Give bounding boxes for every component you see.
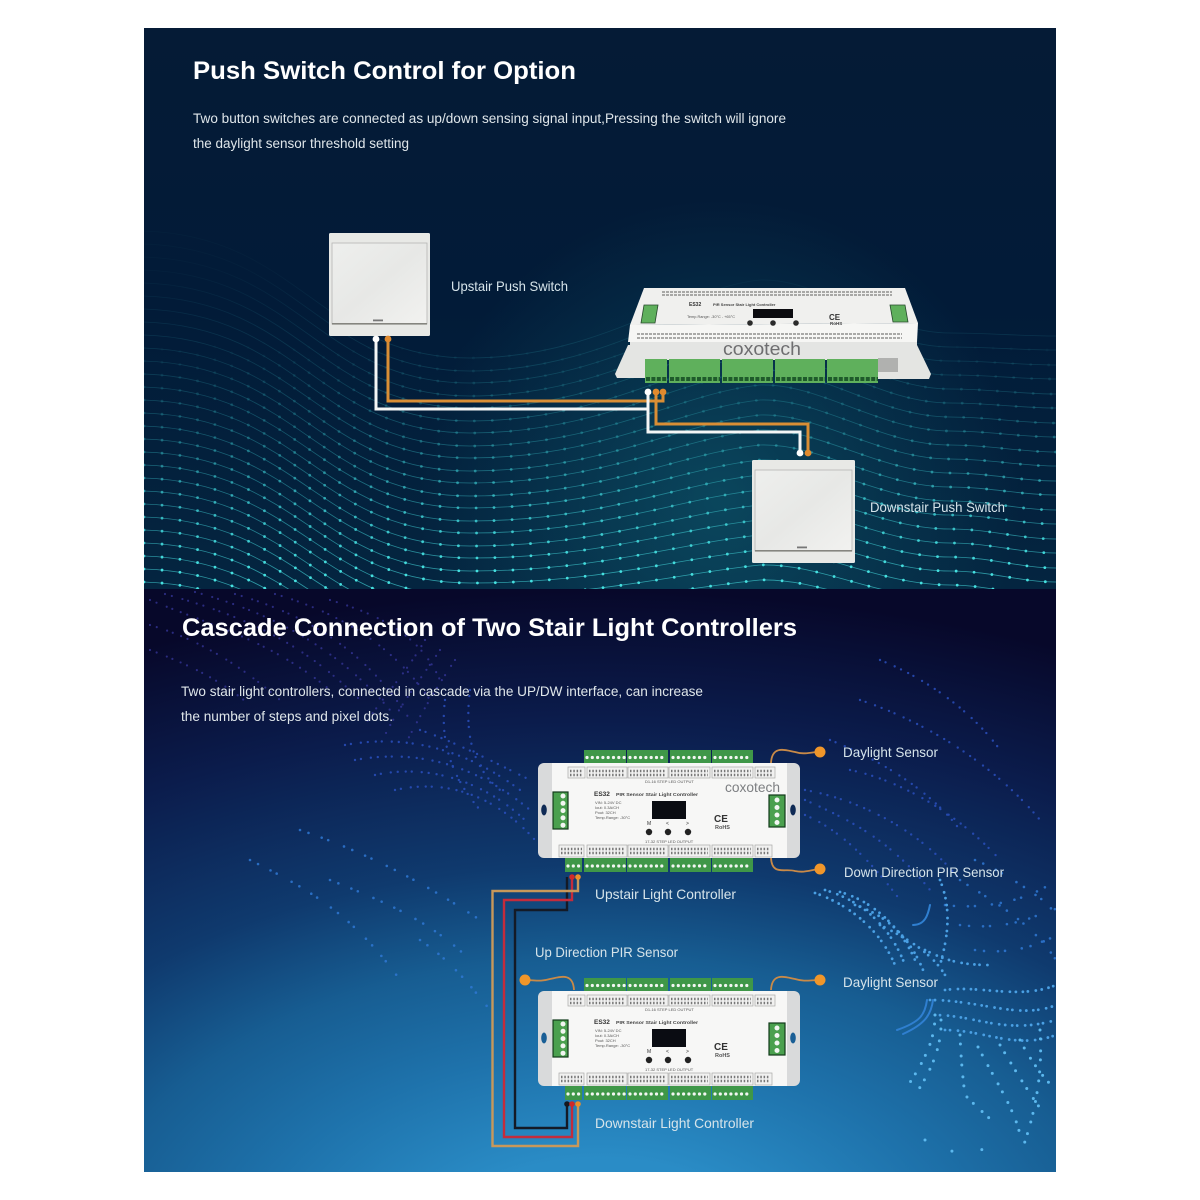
text block: push switch description: the daylight sensor threshold setting — [193, 136, 409, 151]
label: upstair light controller: Upstair Light Controller — [595, 886, 736, 902]
controller: downstair: > — [686, 1049, 689, 1055]
text block: cascade description — [181, 684, 703, 724]
watermark: coxotech: coxotech — [725, 779, 780, 795]
controller: upstair: > — [686, 821, 689, 827]
controller: upstair: < — [666, 821, 669, 827]
label: daylight sensor lower: Daylight Sensor — [843, 974, 938, 990]
terminal labels — [662, 292, 892, 295]
wiring: upstair sensors — [771, 746, 826, 874]
wiring: cascade link between controllers — [492, 874, 581, 1146]
controller: downstair: 17-32 STEP LED OUTPUT — [645, 1067, 694, 1072]
wiring: downstair sensors — [520, 974, 826, 990]
label: down direction pir sensor: Down Direction PIR Sensor — [844, 864, 1004, 880]
controller: downstair: < — [666, 1049, 669, 1055]
heading: cascade connection: Cascade Connection of Two Stair Light Controllers — [182, 614, 797, 642]
icon: upstair push switch — [329, 233, 430, 336]
panel: cascade connection — [144, 589, 1056, 1172]
controller: downstair: CE — [714, 1042, 728, 1053]
controller: downstair: M — [647, 1049, 651, 1055]
background: dotted wave lines — [144, 281, 1056, 589]
controller: upstair: Pout: 32CH — [595, 810, 616, 815]
controller: downstair: Pout: 32CH — [595, 1038, 616, 1043]
controller: downstair: ES32 — [594, 1019, 610, 1026]
controller: downstair: PIR Sensor Stair Light Controller — [616, 1020, 698, 1025]
controller: upstair: ES32 — [594, 791, 610, 798]
green terminal blocks — [645, 359, 878, 383]
wiring: upstair switch to controller — [373, 336, 811, 456]
heading: push switch control: Push Switch Control for Option — [193, 57, 576, 85]
controller: downstair: VIN: 5-24V DC — [595, 1028, 622, 1033]
text block: push switch description: Two button switches are connected as up/down sensing signal input,Pressing the switch will ignore — [193, 111, 786, 126]
controller: upstair: VIN: 5-24V DC — [595, 800, 622, 805]
watermark: coxotech: coxotech — [723, 339, 801, 359]
label: upstair push switch: Upstair Push Switch — [451, 278, 568, 294]
label: daylight sensor: Daylight Sensor — [843, 744, 938, 760]
controller: downstair: Temp.Range: -30°C — [595, 1043, 630, 1048]
text block: cascade description: Two stair light controllers, connected in cascade via the UP/DW interface, can increase — [181, 684, 703, 699]
controller: upstair: D1-16 STEP LED OUTPUT — [645, 779, 694, 784]
controller: downstair — [538, 978, 800, 1100]
controller: upstair: Iout: 0.3A/CH — [595, 805, 619, 810]
device: stair light controller, perspective view: PIR Sensor Stair Light Controller — [713, 302, 776, 307]
controller: downstair: Iout: 0.3A/CH — [595, 1033, 619, 1038]
device: stair light controller, perspective view: ES32 — [689, 302, 701, 308]
device: stair light controller, perspective view — [615, 288, 931, 383]
infographic — [144, 28, 1056, 1172]
device: stair light controller, perspective view: Temp.Range: -30°C - +65°C — [687, 314, 735, 319]
controller: upstair: M — [647, 821, 651, 827]
label: downstair push switch: Downstair Push Switch — [870, 499, 1005, 515]
controller: downstair: D1-16 STEP LED OUTPUT — [645, 1007, 694, 1012]
background: particle swirl — [150, 592, 1056, 1151]
controller: downstair: RoHS — [715, 1053, 730, 1059]
device: stair light controller, perspective view: CE — [829, 313, 841, 322]
label: downstair light controller: Downstair Light Controller — [595, 1115, 754, 1131]
controller: upstair — [538, 750, 800, 872]
device: stair light controller, perspective view: RoHS — [830, 321, 842, 326]
controller: upstair: 17-32 STEP LED OUTPUT — [645, 839, 694, 844]
controller: upstair: Temp.Range: -30°C — [595, 815, 630, 820]
text block: push switch description — [193, 111, 786, 151]
label: up direction pir sensor: Up Direction PIR Sensor — [535, 944, 678, 960]
controller: upstair: RoHS — [715, 825, 730, 831]
controller: upstair: PIR Sensor Stair Light Controller — [616, 792, 698, 797]
icon: downstair push switch — [752, 460, 855, 563]
side connectors — [641, 305, 658, 323]
controller: upstair: CE — [714, 814, 728, 825]
text block: cascade description: the number of steps and pixel dots. — [181, 709, 393, 724]
panel: push switch control — [144, 28, 1056, 589]
